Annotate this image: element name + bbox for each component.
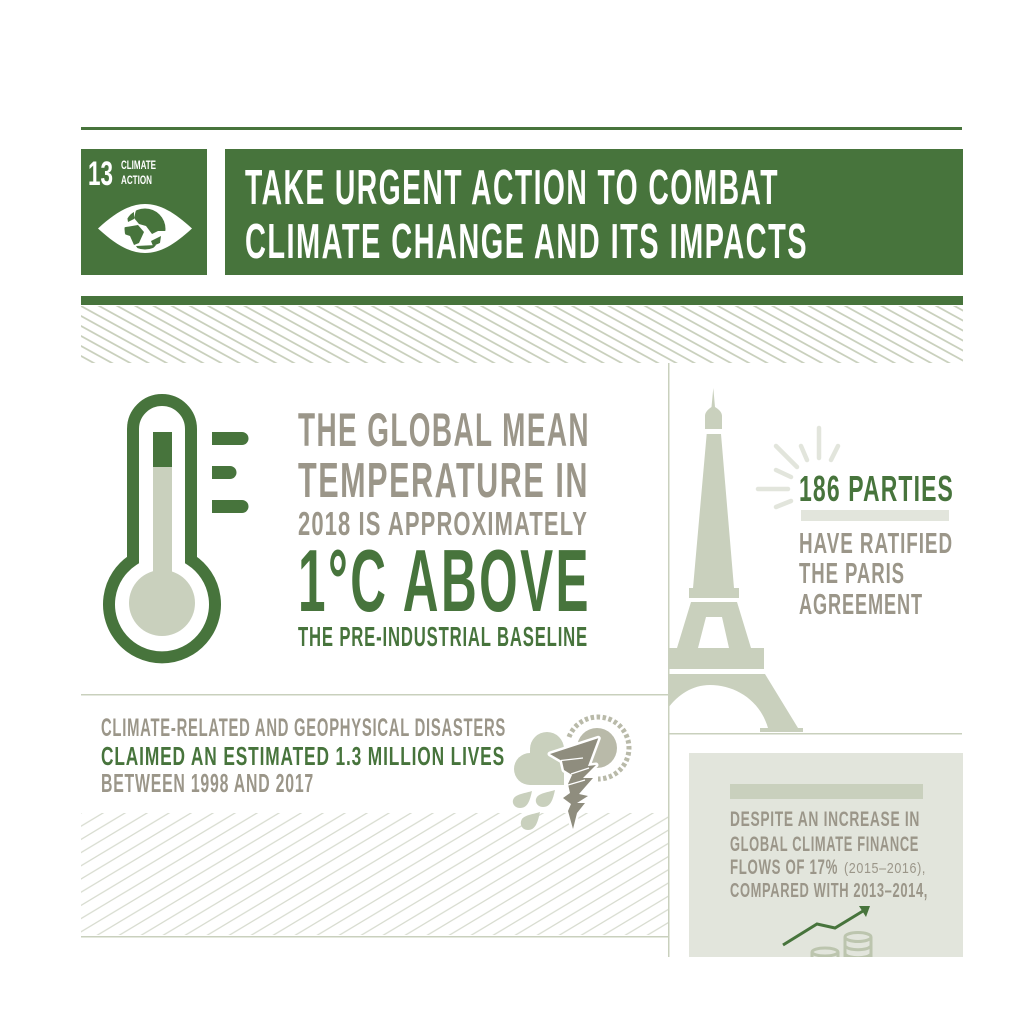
text block: Paris Agreement (799, 468, 954, 621)
text block: Paris Agreement: THE PARIS (799, 558, 905, 590)
text block: global mean temperature (298, 403, 591, 652)
icon: thermometer (109, 400, 249, 657)
key figure: 1°C above: 1°C ABOVE (298, 531, 591, 630)
text block: finance flows (730, 808, 928, 902)
title (245, 161, 808, 269)
icon: radiating lines (758, 428, 838, 507)
icon: storm with tornado, cloud and sun (513, 717, 629, 830)
text block: global mean temperature: THE GLOBAL MEAN (298, 403, 590, 456)
text block: disasters: BETWEEN 1998 AND 2017 (101, 768, 314, 798)
text block: global mean temperature: 2018 IS APPROXIMATELY (298, 505, 588, 542)
goal name (121, 158, 156, 187)
panel: title banner (225, 149, 963, 275)
goal name: CLIMATE (121, 158, 156, 172)
text block: disasters: CLIMATE-RELATED AND GEOPHYSICAL DISASTERS (101, 714, 506, 742)
text block: finance flows: DESPITE AN INCREASE IN (730, 808, 920, 831)
goal name: ACTION (121, 173, 152, 187)
text block: disasters (101, 714, 506, 798)
icon: eye with globe (98, 204, 192, 253)
panel: climate finance (689, 753, 963, 964)
goal number: 13 (88, 155, 113, 193)
text block: disasters: CLAIMED AN ESTIMATED 1.3 MILLION LIVES (101, 741, 505, 771)
text block: global mean temperature: THE PRE-INDUSTRIAL BASELINE (298, 621, 588, 652)
text block: finance flows: (2015–2016), (844, 860, 926, 877)
icon: Eiffel Tower (668, 388, 803, 732)
text block: global mean temperature: TEMPERATURE IN (298, 454, 589, 508)
icon: rising arrow and coins (783, 906, 871, 964)
text block: finance flows: FLOWS OF 17% (730, 856, 838, 879)
panel: SDG 13 badge (81, 149, 207, 275)
text block: Paris Agreement: AGREEMENT (799, 589, 923, 621)
